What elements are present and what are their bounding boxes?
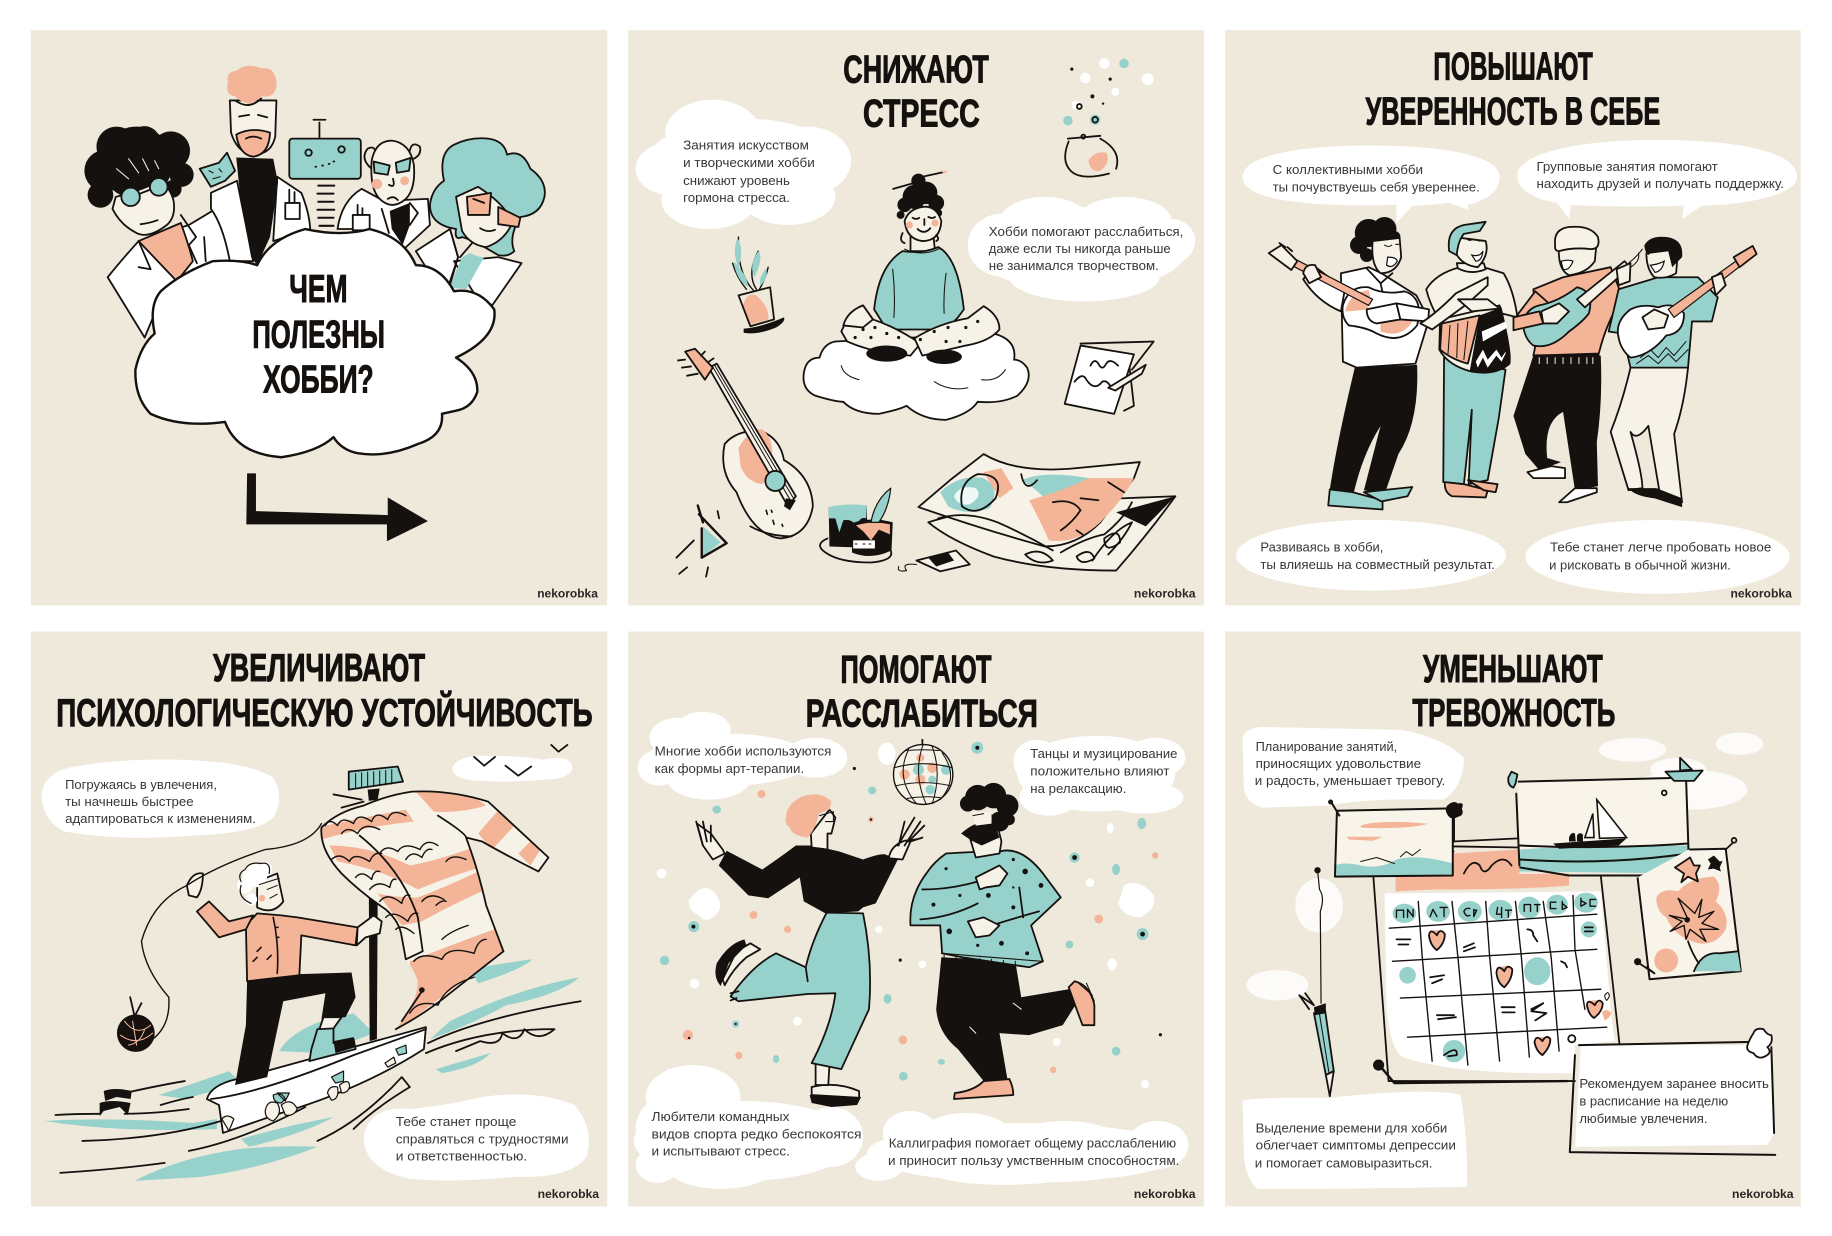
- illustration: fishbowl with bubbles: [1063, 58, 1154, 177]
- confetti dots: [657, 742, 1162, 1088]
- speech bubble: developing in a hobby: ты влияешь на совместный результат.: [1260, 557, 1495, 572]
- brand label: nekorobka: [537, 587, 598, 600]
- speech cloud: art lowers stress hormone: [636, 100, 851, 229]
- heading: raise self-confidence: [1366, 45, 1660, 134]
- speech cloud: adapting to changes: [41, 760, 279, 838]
- note: schedule your hobbies: Рекомендуем заранее вносить: [1579, 1076, 1769, 1091]
- panel: reduce stress: [628, 30, 1204, 606]
- brand label: nekorobka: [1730, 588, 1793, 600]
- speech cloud: dancing and music: [1013, 736, 1185, 816]
- speech bubble: developing in a hobby: Развиваясь в хобби,: [1260, 540, 1383, 555]
- illustration: scientist with teal hair: [416, 138, 545, 305]
- illustration: potted plant: [733, 237, 784, 333]
- heading: reduce anxiety: УМЕНЬШАЮТ: [1423, 648, 1603, 691]
- heading: increase psychological resilience: [56, 646, 593, 735]
- illustration: cloud with birds: [452, 745, 573, 782]
- note: planning activities: Планирование занятий,: [1256, 739, 1397, 754]
- illustration: seaside picture: [1329, 800, 1463, 877]
- illustration: scientist with black curly hair: [84, 126, 230, 338]
- speech cloud: art lowers stress hormone: и творческими хобби: [683, 155, 815, 170]
- panel: reduce anxiety: [1225, 632, 1801, 1206]
- speech bubble: easier to try new things: Тебе станет легче пробовать новое: [1550, 540, 1771, 555]
- illustration: cloud under the person: [803, 333, 1029, 420]
- illustration: drummer with teal hair: [1420, 222, 1517, 497]
- speech cloud: art lowers stress hormone: гормона стресса.: [683, 190, 790, 205]
- panel: cover, what hobbies are good for: [31, 30, 607, 606]
- illustration: singer with black hair and white guitar: [1609, 237, 1757, 507]
- speech cloud: adapting to changes: Погружаясь в увлечения,: [65, 777, 217, 792]
- speech cloud: calligraphy: [855, 1111, 1188, 1185]
- speech cloud: dancing and music: положительно влияют: [1030, 764, 1169, 779]
- speech bubble: easier to try new things: [1525, 520, 1790, 594]
- speech cloud: adapting to changes: ты начнешь быстрее: [65, 794, 194, 809]
- illustration: musician with curly hair and guitar: [1269, 217, 1429, 509]
- speech bubble: group activities: Групповые занятия помогают: [1536, 159, 1718, 174]
- illustration: tall scientist with peach hair and beard: [200, 66, 310, 265]
- illustration: waves: [44, 959, 581, 1181]
- speech cloud: calligraphy: и приносит пользу умственным способностям.: [888, 1153, 1179, 1168]
- speech cloud: hobbies help relax: [968, 197, 1195, 301]
- brand label: nekorobka: [1134, 1189, 1196, 1201]
- illustration: pencil: [1299, 867, 1334, 1096]
- heading: help to relax: РАССЛАБИТЬСЯ: [806, 692, 1038, 736]
- illustration: sweater sail: [317, 790, 548, 1033]
- illustration: singer with peach sweater and teal guitar: [1513, 227, 1642, 502]
- speech cloud: adapting to changes: адаптироваться к изменениям.: [65, 811, 256, 826]
- heading: raise self-confidence: УВЕРЕННОСТЬ В СЕБЕ: [1366, 90, 1660, 134]
- note: schedule your hobbies: [1570, 1029, 1775, 1155]
- note: schedule your hobbies: любимые увлечения.: [1579, 1111, 1707, 1126]
- heading: what hobbies are good for: ХОББИ?: [263, 358, 374, 402]
- speech cloud: coping with difficulties: Тебе станет проще: [396, 1114, 516, 1129]
- speech cloud: team sports: и испытывают стресс.: [652, 1144, 790, 1159]
- illustration: dancing man: [910, 783, 1094, 1099]
- speech cloud: art lowers stress hormone: снижают уровень: [683, 173, 790, 188]
- heading: what hobbies are good for: ПОЛЕЗНЫ: [252, 313, 385, 357]
- heading: reduce anxiety: [1412, 648, 1615, 735]
- panel: raise self-confidence: [1225, 30, 1801, 606]
- heading: help to relax: [806, 648, 1038, 736]
- speech cloud: team sports: [634, 1065, 863, 1189]
- illustration: flower picture: [1634, 838, 1742, 979]
- illustration: robot: [289, 120, 361, 226]
- speech cloud: dancing and music: на релаксацию.: [1030, 781, 1126, 796]
- illustration: triangle instrument: [676, 505, 727, 577]
- heading: increase psychological resilience: ПСИХОЛОГИЧЕСКУЮ УСТОЙЧИВОСТЬ: [56, 690, 593, 735]
- illustration: meditating person: [841, 171, 1005, 389]
- speech cloud: team sports: Любители командных: [652, 1109, 790, 1124]
- speech cloud: art therapy: как формы арт-терапии.: [655, 761, 804, 776]
- speech cloud: art lowers stress hormone: Занятия искусством: [683, 137, 809, 152]
- illustration: slippers: [100, 1089, 132, 1116]
- illustration: paint pots: [820, 488, 893, 563]
- brand label: nekorobka: [1134, 588, 1196, 601]
- illustration: mast and hat: [333, 766, 403, 1041]
- heading: raise self-confidence: ПОВЫШАЮТ: [1433, 45, 1593, 89]
- brand label: nekorobka: [1732, 1189, 1794, 1201]
- speech cloud: coping with difficulties: и ответственностью.: [396, 1149, 527, 1163]
- panel: help to relax: [628, 632, 1204, 1206]
- illustration: abstract paintings: [918, 454, 1175, 571]
- speech bubble: group hobbies: С коллективными хобби: [1273, 162, 1423, 177]
- note: planning activities: [1243, 727, 1464, 808]
- heading: increase psychological resilience: УВЕЛИЧИВАЮТ: [213, 646, 425, 690]
- speech bubble: group activities: находить друзей и получать поддержку.: [1536, 176, 1784, 191]
- illustration: yarn ball and thread: [117, 824, 321, 1052]
- speech bubble: developing in a hobby: [1236, 520, 1506, 591]
- speech cloud: calligraphy: Каллиграфия помогает общему расслаблению: [889, 1135, 1176, 1150]
- speech cloud: team sports: видов спорта редко беспокоятся: [652, 1126, 861, 1142]
- note: time for hobbies: и помогает самовыразиться.: [1255, 1155, 1433, 1170]
- illustration: boat with strawberries: [207, 1027, 426, 1133]
- speech bubble: easier to try new things: и рисковать в обычной жизни.: [1549, 557, 1731, 572]
- illustration: paint tube: [898, 550, 970, 571]
- heading: reduce stress: СТРЕСС: [863, 92, 980, 136]
- illustration: bald scientist: [338, 141, 430, 249]
- heading: what hobbies are good for: [252, 267, 385, 402]
- speech bubble: group hobbies: [1242, 145, 1500, 223]
- note: planning activities: и радость, уменьшает тревогу.: [1255, 773, 1445, 788]
- brand label: nekorobka: [538, 1188, 600, 1201]
- illustration: guitar: [678, 349, 813, 538]
- illustration: dancing woman: [696, 794, 924, 1107]
- speech cloud: art therapy: Многие хобби используются: [655, 743, 831, 758]
- note: time for hobbies: Выделение времени для хобби: [1256, 1121, 1447, 1136]
- illustration: sheets with writing and pen: [1065, 342, 1154, 414]
- speech cloud: dancing and music: Танцы и музицирование: [1030, 746, 1177, 761]
- illustration: grandmother at the mast: [187, 862, 382, 1085]
- heading: help to relax: ПОМОГАЮТ: [841, 648, 992, 692]
- illustration: sailboat picture: [1508, 758, 1703, 875]
- panel: increase psychological resilience: [31, 632, 607, 1206]
- arrow pointing right: [246, 473, 428, 541]
- illustration: disco ball: [894, 740, 953, 804]
- heading: reduce stress: СНИЖАЮТ: [843, 48, 989, 91]
- speech cloud: hobbies help relax: Хобби помогают расслабиться,: [989, 224, 1183, 239]
- speech cloud with title: [135, 229, 495, 457]
- note: planning activities: приносящих удовольствие: [1256, 756, 1421, 771]
- heading: what hobbies are good for: ЧЕМ: [289, 267, 348, 311]
- illustration: calendar: [1373, 838, 1619, 1083]
- speech cloud: hobbies help relax: не занимался творчеством.: [989, 258, 1159, 273]
- speech bubble: group hobbies: ты почувствуешь себя увереннее.: [1273, 180, 1480, 195]
- speech cloud: coping with difficulties: справляться с трудностями: [396, 1131, 569, 1146]
- background clouds: [1246, 733, 1763, 1000]
- note: schedule your hobbies: в расписание на неделю: [1579, 1093, 1728, 1108]
- speech bubble: group activities: [1517, 140, 1797, 219]
- note: time for hobbies: [1243, 1092, 1467, 1189]
- speech cloud: coping with difficulties: [364, 1094, 589, 1180]
- note: time for hobbies: облегчает симптомы депрессии: [1256, 1138, 1456, 1153]
- heading: reduce stress: [843, 48, 989, 136]
- speech cloud: hobbies help relax: даже если ты никогда раньше: [989, 241, 1171, 256]
- heading: reduce anxiety: ТРЕВОЖНОСТЬ: [1412, 692, 1615, 735]
- speech cloud: art therapy: [638, 712, 847, 800]
